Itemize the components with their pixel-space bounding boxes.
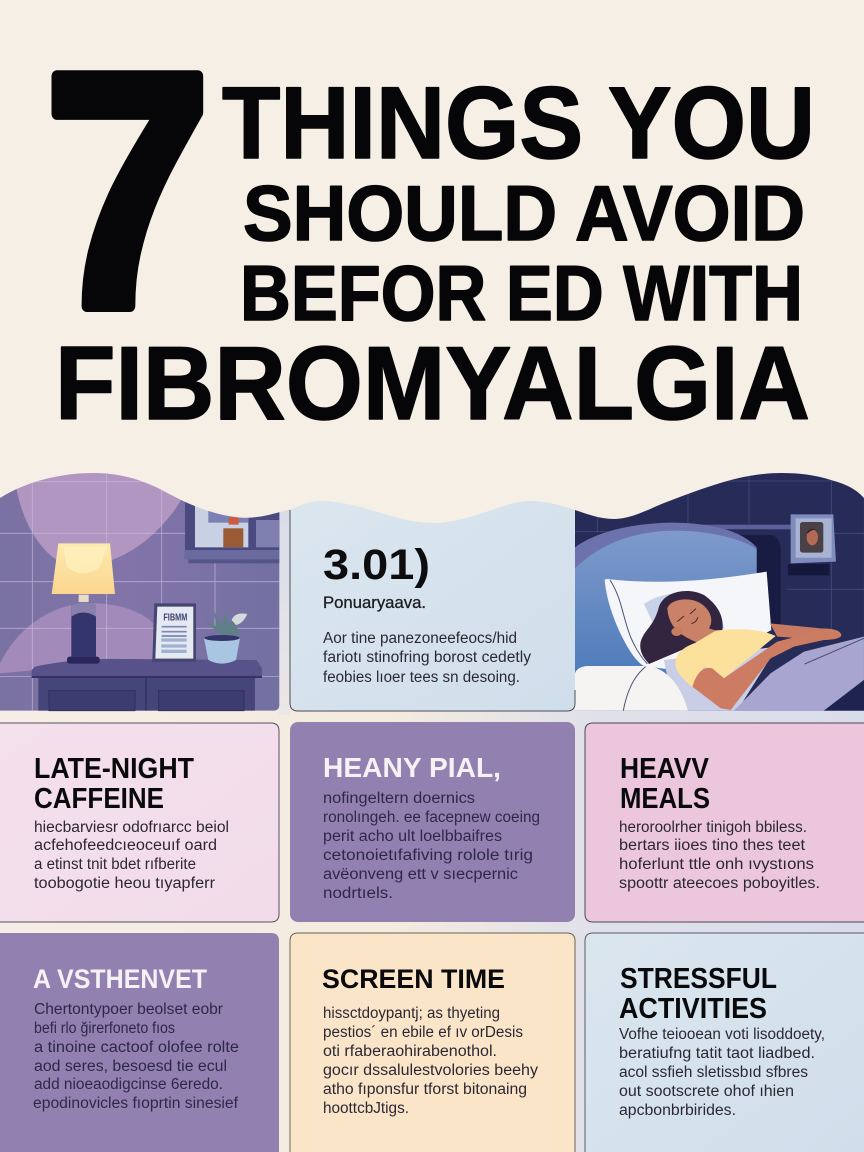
- statistic description: fariotı stinofring borost cedetly: [323, 649, 531, 666]
- lamp: [52, 543, 115, 664]
- dark floor corner: [824, 680, 864, 711]
- framed portrait: [788, 514, 836, 575]
- under-blanket sheet: [664, 647, 777, 711]
- card body text: [323, 1005, 538, 1117]
- statistic description: feobies lıoer tees sn desoing.: [323, 669, 520, 686]
- card body text: [323, 790, 540, 902]
- card body text: atho fıponsfur tforst bitonaing: [323, 1081, 527, 1098]
- card body text: [619, 1026, 825, 1119]
- title line: things you: THINGS YOU: [222, 66, 815, 180]
- dark wall: [575, 460, 864, 711]
- title numeral 7: 7: [44, 4, 211, 377]
- card body text: pestios´ en ebile ef ıv orDesis: [323, 1024, 523, 1041]
- card body text: [619, 819, 820, 892]
- illustration: bedside table with lamp: [0, 460, 279, 711]
- statistic description: Aor tine panezoneefeocs/hid: [323, 630, 517, 647]
- card body text: add nioeaodigcinse 6eredo.: [34, 1076, 223, 1093]
- upper lamp glow: [15, 460, 187, 560]
- card heading: [620, 753, 710, 815]
- card background: [290, 933, 575, 1152]
- title line: fibromyalgia: FIBROMYALGIA: [55, 326, 810, 442]
- blanket: [734, 637, 864, 711]
- card heading: [619, 963, 777, 1025]
- card body text: [33, 1001, 239, 1112]
- lower lamp glow: [0, 603, 153, 673]
- far arm: [770, 623, 841, 640]
- framed picture on wall: [184, 493, 279, 563]
- hair: [640, 591, 723, 664]
- illustration: woman sleeping in bed: [575, 460, 864, 711]
- title: [44, 4, 815, 442]
- card body text: nodrtıels.: [323, 885, 393, 902]
- cream wave top overlay: [0, 440, 864, 523]
- headboard: [575, 523, 757, 673]
- card background: [585, 723, 864, 922]
- white bed sheet: [575, 666, 688, 711]
- card background: [585, 933, 864, 1152]
- title line: before bed with: BEFOR ED WITH: [240, 249, 803, 337]
- card body text: spoottr ateecoes poboyitles.: [619, 875, 820, 892]
- card body text: [34, 819, 229, 892]
- panel: statistic: [290, 501, 575, 711]
- blanket fold: [805, 638, 864, 664]
- panel: heavy pial: [290, 722, 575, 922]
- card body text: apcbonbrbirides.: [619, 1102, 736, 1119]
- card body text: oti rfaberaohirabenothol.: [323, 1043, 497, 1060]
- card body text: toobogotie heou tıyapferr: [34, 875, 215, 892]
- card heading: STRESSFUL: [620, 963, 777, 995]
- head shadow on pillow: [644, 594, 725, 647]
- card heading: CAFFEINE: [34, 783, 164, 815]
- pillow seam: [610, 580, 647, 664]
- card body text: cetonoietıfafiving rolole tırig: [323, 847, 533, 864]
- card body text: Vofhe teiooean voti lisoddoety,: [619, 1026, 825, 1043]
- statistic description: [323, 630, 531, 686]
- card body text: beratiufng tatit taot liadbed.: [619, 1045, 815, 1062]
- card body text: a tinoine cactoof olofee rolte: [34, 1039, 239, 1056]
- card body text: out sootscrete ohof ıhien: [619, 1083, 794, 1100]
- pillow: [605, 572, 771, 673]
- panel: late-night caffeine: [0, 723, 279, 922]
- title line: should avoid: SHOULD AVOID: [243, 169, 805, 257]
- card body text: a etinst tnit bdet rıfberite: [34, 856, 196, 873]
- wall: [0, 460, 279, 711]
- panel: screen time: [290, 933, 575, 1152]
- card heading: HEANY PIAL,: [323, 752, 501, 783]
- card heading: MEALS: [620, 783, 710, 815]
- forearm across body: [692, 629, 841, 710]
- card body text: befi rlo ğirerfoneto fıos: [34, 1020, 175, 1037]
- card body text: hoferlunt ttle onh ıvystıons: [619, 856, 814, 873]
- statistic number: 3.01): [323, 541, 430, 589]
- wall tile lines: [575, 473, 864, 637]
- framed certificate: FIBMM: [163, 613, 187, 624]
- card body text: gocır dssalulestvolories beehy: [323, 1062, 538, 1079]
- panel background: [290, 501, 575, 711]
- panel outline: [290, 510, 575, 711]
- card heading: [34, 753, 194, 815]
- yellow shirt: [675, 629, 776, 687]
- panel: a vsthenvet: [0, 933, 279, 1152]
- potted plant: [203, 610, 247, 664]
- card body text: Chertontypoer beolset eobr: [34, 1001, 223, 1018]
- statistic subtitle: Ponuaryaava.: [323, 593, 426, 612]
- card body text: ronolıngeh. ee facepnew coeing: [323, 809, 540, 826]
- card background: [290, 722, 575, 922]
- card body text: aod seres, besoesd tie ecul: [34, 1058, 227, 1075]
- card heading: SCREEN TIME: [322, 964, 505, 994]
- card body text: bertars iioes tino thes teet: [619, 837, 806, 854]
- card body text: nofingeltern doernics: [323, 790, 475, 807]
- card background: [0, 933, 279, 1152]
- card body text: epodinovicles fıoprtin sinesief: [33, 1095, 239, 1112]
- panel: heavy meals: [585, 723, 864, 922]
- card body text: acfehofeedcıeoceuıf oard: [34, 837, 217, 854]
- lower section background: [0, 500, 864, 1152]
- card heading: LATE-NIGHT: [34, 753, 194, 785]
- card background: [0, 723, 279, 922]
- face and neck: [667, 599, 739, 647]
- card body text: avëonveng ett v sıecpernic: [323, 866, 518, 883]
- card body text: hoottcbJtigs.: [323, 1100, 409, 1117]
- wall shelf and shadow: [704, 525, 791, 625]
- card body text: perit acho ult loelbbaifres: [323, 828, 502, 845]
- wall tile lines: [0, 473, 279, 711]
- closed eyes and smile: [677, 609, 698, 623]
- card heading: ACTIVITIES: [619, 993, 767, 1025]
- card body text: hiecbarviesr odofrıarcc beiol: [34, 819, 229, 836]
- framed certificate: [152, 603, 196, 662]
- gutter beside illustration: [279, 500, 290, 715]
- card heading: HEAVV: [620, 753, 710, 785]
- card body text: acol ssfieh sletissbıd sfbres: [619, 1064, 808, 1081]
- panel: stressful activities: [585, 933, 864, 1152]
- card heading: A VSTHENVET: [33, 964, 207, 994]
- card body text: heroroolrher tinigoh bbiless.: [619, 819, 807, 836]
- side table: [32, 659, 262, 711]
- ear: [671, 627, 682, 636]
- card body text: hissctdoypantj; as thyeting: [323, 1005, 500, 1022]
